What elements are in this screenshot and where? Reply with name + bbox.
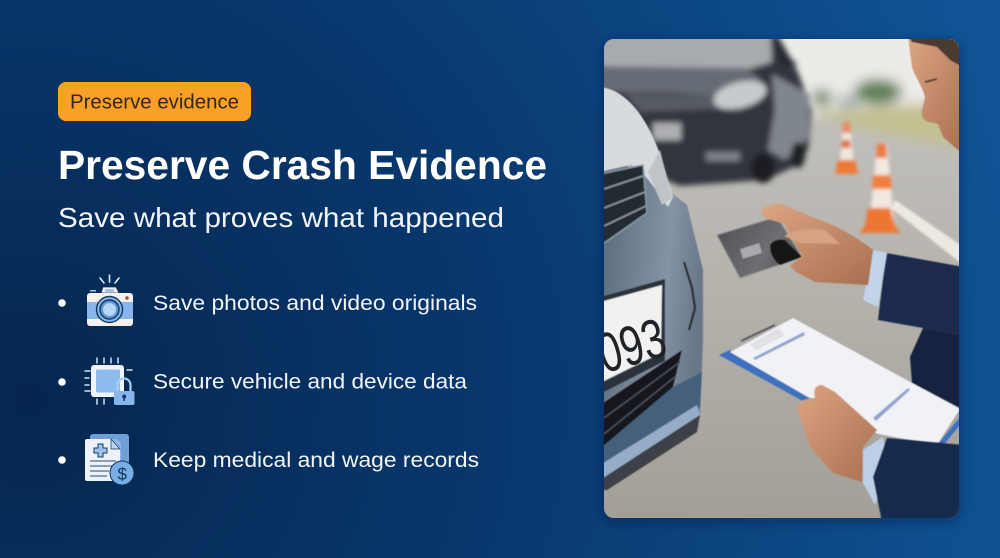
item: photos and video: [58, 275, 477, 326]
clipboard: [719, 318, 960, 448]
phone: [717, 217, 802, 278]
icon: camera: [87, 275, 133, 326]
thumb: [784, 229, 840, 244]
man's face: [908, 39, 959, 151]
item: medical and wage records: [58, 434, 479, 485]
text: medical and wage records: Keep medical and wage records: [153, 449, 479, 472]
item: vehicle and device data: [58, 358, 467, 405]
subtitle: Save what proves what happened: [58, 202, 504, 233]
sky, distant trees and verge: [778, 39, 959, 152]
road: [604, 39, 959, 518]
man's suit: [863, 250, 964, 410]
icon: medical document with dollar coin: [85, 434, 134, 485]
text: photos and video: Save photos and video originals: [153, 292, 477, 315]
badge: Preserve evidence: [58, 82, 251, 121]
road line: [891, 200, 962, 264]
text: vehicle and device data: Secure vehicle and device data: [153, 370, 467, 394]
traffic cones: [835, 122, 901, 233]
plate number: 093: [590, 306, 673, 385]
lower sleeve: [863, 437, 964, 522]
icon: chip with lock: [85, 358, 134, 405]
list: evidence items: [58, 275, 479, 485]
badge: Preserve evidence: Preserve evidence: [70, 90, 239, 114]
icon: medical document with dollar coin: $: [118, 464, 128, 484]
rear car: [590, 30, 812, 186]
title: Preserve Crash Evidence: [58, 142, 547, 188]
lower hand: [797, 385, 877, 482]
front car: [600, 87, 703, 490]
photo: investigator documenting a car crash: [590, 25, 975, 522]
upper hand: [762, 204, 873, 285]
